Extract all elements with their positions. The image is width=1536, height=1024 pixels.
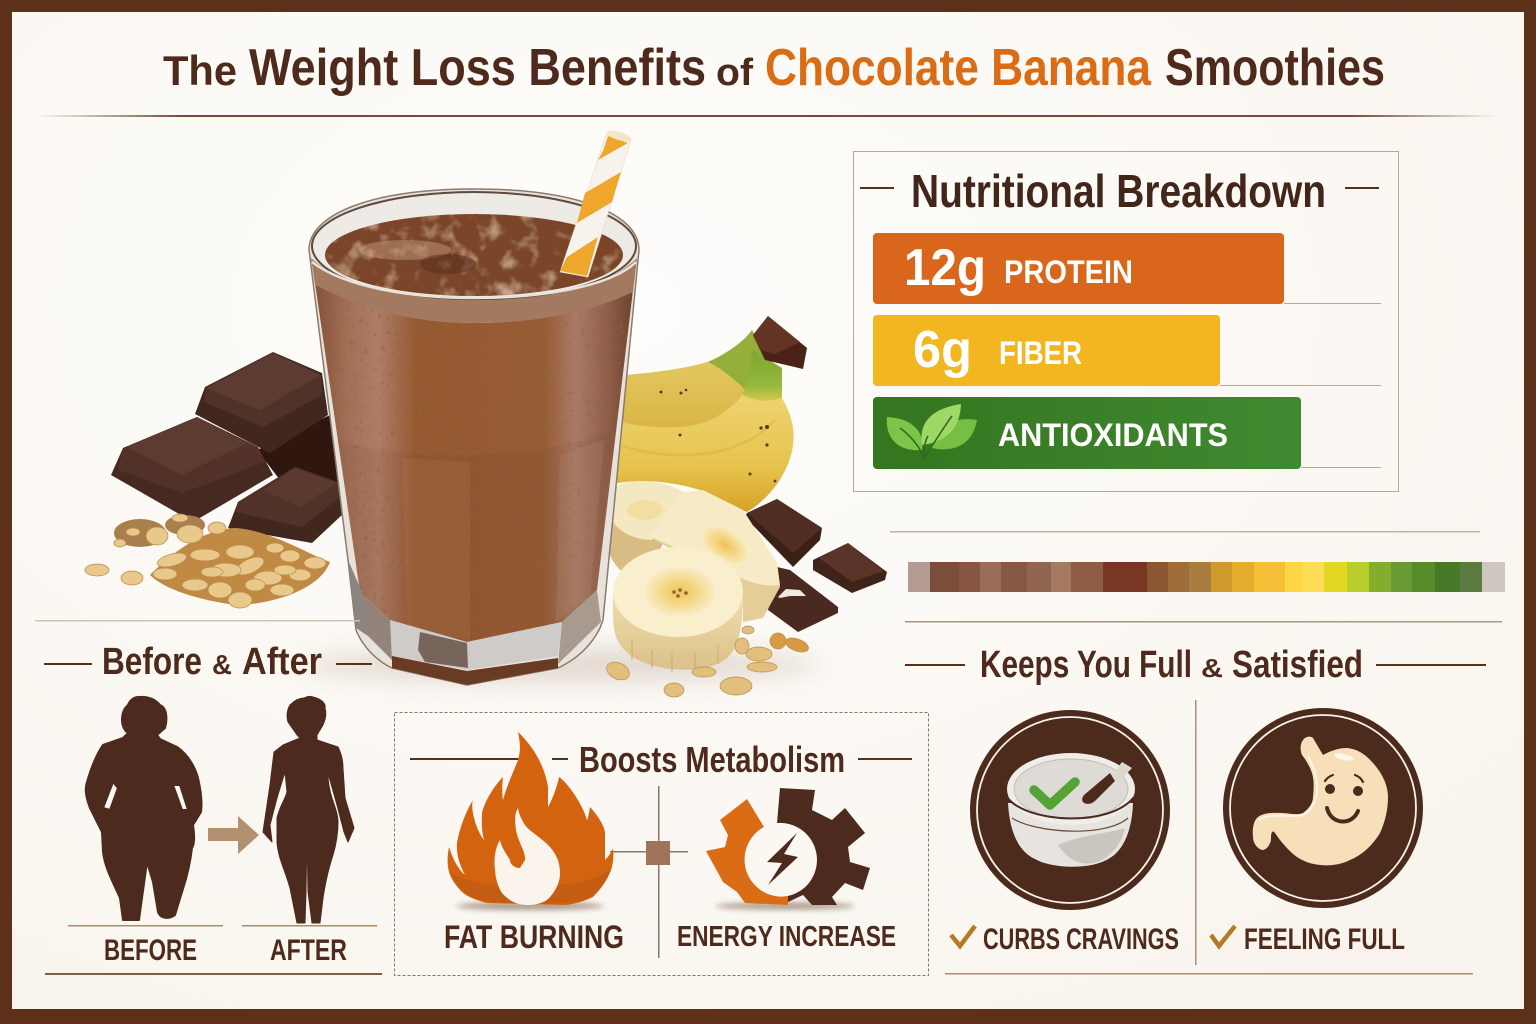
icon: flame [448,732,613,910]
bar: antioxidants: ANTIOXIDANTS [998,417,1228,453]
title: of [716,52,753,94]
bar rules [1220,304,1381,468]
lower facet band [338,430,612,642]
heading: before and after: After [242,641,322,683]
back slice [608,481,685,572]
glass body outline [309,189,639,685]
heading: before and after: Before [102,641,202,683]
title: The [163,47,237,94]
bar: fiber [873,315,1220,386]
hero: banana slices [608,481,780,672]
icon: happy stomach [1223,708,1423,908]
panel: nutritional breakdown [854,152,1398,492]
bar: antioxidants [873,397,1301,469]
label: fat burning: FAT BURNING [444,919,624,955]
heading: keeps you full and satisfied: Keeps You Full [980,644,1192,686]
colour palette strip [908,562,1505,592]
glass base facets [348,560,601,685]
label: energy increase: ENERGY INCREASE [677,921,896,953]
divider below colour strip [905,621,1502,622]
front slice [613,592,743,670]
lower right block [228,467,343,543]
divider with square [610,786,688,958]
rule under silhouettes [68,925,223,926]
left block [111,417,273,522]
item: curbs cravings: CURBS CRAVINGS [983,923,1179,956]
bar: protein: PROTEIN [1004,254,1133,290]
heading: before and after: & [212,649,232,680]
bar: protein: 12g [904,239,986,297]
icon: bowl with check mark [970,710,1170,910]
panel: boosts metabolism [394,712,928,976]
stem [743,350,782,401]
rim interior [312,192,636,300]
smoothie grain [315,283,633,642]
icon: after silhouette [263,696,354,923]
title [163,39,1385,97]
item: feeling full: FEELING FULL [1244,923,1405,956]
rim front curve [312,262,636,298]
liquid seen through rim front [311,258,637,323]
chocolate on banana stem [753,316,807,369]
icon: leaves [887,404,977,459]
heading: boosts metabolism: Boosts Metabolism [579,739,845,780]
front banana [613,394,794,512]
icon: gear with lightning bolt [706,788,870,910]
bar: fiber: 6g [913,321,972,379]
label: before: BEFORE [104,934,197,967]
back banana [620,330,765,433]
hero: smoothie glass [309,189,639,685]
banana specks [660,389,776,482]
middle slice [650,490,780,622]
title: Chocolate Banana [765,39,1152,97]
item: feeling full [1211,923,1405,956]
divider above colour strip [890,531,1480,532]
hero: dark chocolate pieces right [745,499,887,632]
hero: oats [85,514,330,608]
hero: scattered oats and crumbs [604,626,810,697]
bar: fiber: FIBER [999,335,1082,371]
upper block [195,352,328,453]
dark stacked piece [257,415,342,500]
panel: keeps you full and satisfied [905,644,1486,974]
label: after: AFTER [270,934,347,967]
panel: before and after [44,641,382,975]
hero shadow [300,647,820,683]
smoothie surface [325,214,623,296]
arrow: before to after [208,816,259,854]
bar: protein [873,233,1284,304]
item: curbs cravings [951,923,1179,956]
hero: chocolate chunks [111,352,343,543]
hero: bananas [613,316,807,512]
heading: keeps you full and satisfied: & [1201,653,1223,683]
title: Smoothies [1165,39,1385,97]
heading: before and after [102,641,322,683]
icon: before silhouette [86,697,202,920]
heading: nutritional breakdown: Nutritional Breakdown [911,165,1326,217]
hero: striped straw [560,128,633,277]
heading: keeps you full and satisfied: Satisfied [1232,644,1363,686]
title: Weight Loss Benefits [249,39,706,97]
smoothie body [315,283,633,642]
